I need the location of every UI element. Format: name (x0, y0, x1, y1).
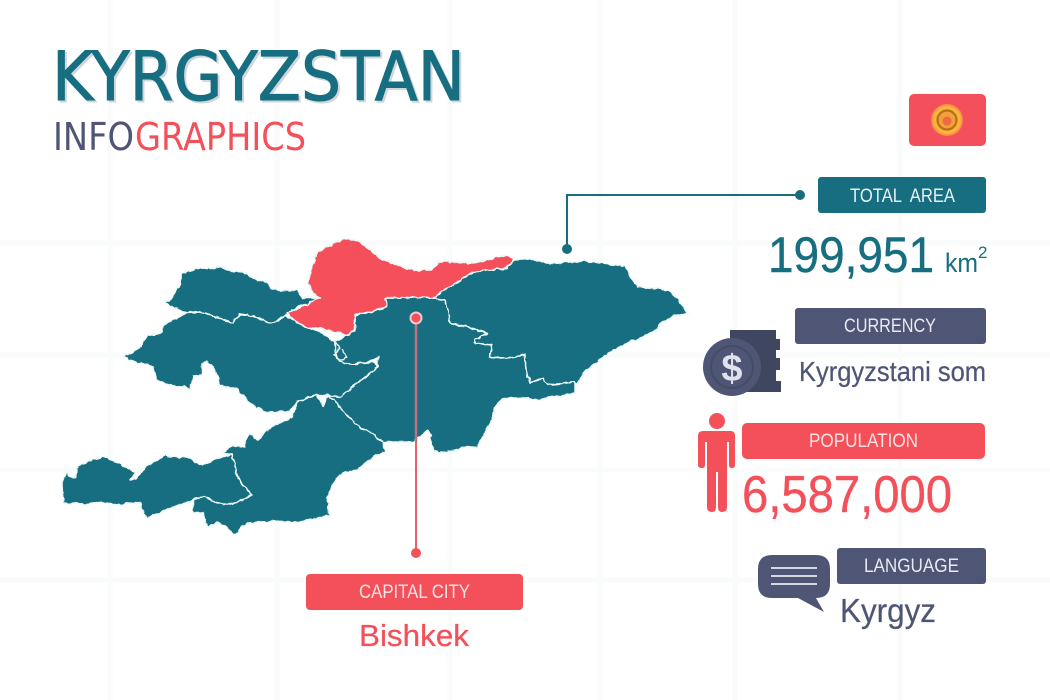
panel: currency (703, 308, 986, 396)
region: Naryn (328, 297, 575, 453)
region: Talas (165, 267, 320, 323)
value: area: km (945, 248, 978, 278)
value: capital city: Bishkek (359, 618, 470, 653)
panel: language (758, 548, 986, 629)
value: area: 199,951 (768, 227, 934, 283)
icon: Kyrgyzstan flag (909, 94, 986, 146)
value: area: 2 (978, 243, 987, 262)
callout: total area connector (562, 190, 805, 254)
heading: population: POPULATION (809, 431, 918, 452)
heading: capital city: CAPITAL CITY (359, 582, 470, 603)
subtitle: GRAPHICS (135, 115, 306, 159)
icon: coin stack (703, 330, 781, 396)
subtitle (53, 115, 306, 159)
region: enclave border (334, 342, 347, 361)
region: Jalal-Abad (123, 312, 378, 413)
icon: person (698, 413, 735, 512)
map of Kyrgyzstan (62, 238, 688, 535)
region: Issyk-Kul (433, 259, 688, 385)
heading: population (742, 423, 985, 459)
region: Chuy (highlighted) (287, 238, 515, 335)
heading: total area (818, 177, 986, 213)
heading: total area: TOTAL AREA (850, 186, 955, 207)
title: KYRGYZSTAN (54, 40, 467, 119)
title: KYRGYZSTAN (52, 38, 465, 117)
value: population: 6,587,000 (742, 466, 952, 524)
callout: capital city connector (410, 312, 422, 558)
subtitle: INFO (53, 115, 134, 159)
region: Batken (62, 454, 252, 518)
panel: total area (768, 177, 987, 283)
icon: coin stack: $ (721, 348, 743, 390)
heading: currency: CURRENCY (844, 316, 936, 337)
icon: speech bubble (758, 555, 830, 612)
heading: currency (795, 308, 986, 344)
value: currency: Kyrgyzstani som (799, 356, 986, 387)
heading: language: LANGUAGE (864, 556, 959, 577)
panel: capital city (306, 574, 523, 653)
region: Osh (193, 395, 385, 535)
value: language: Kyrgyz (840, 592, 936, 629)
heading: capital city (306, 574, 523, 610)
panel: population (698, 413, 985, 524)
heading: language (837, 548, 986, 584)
